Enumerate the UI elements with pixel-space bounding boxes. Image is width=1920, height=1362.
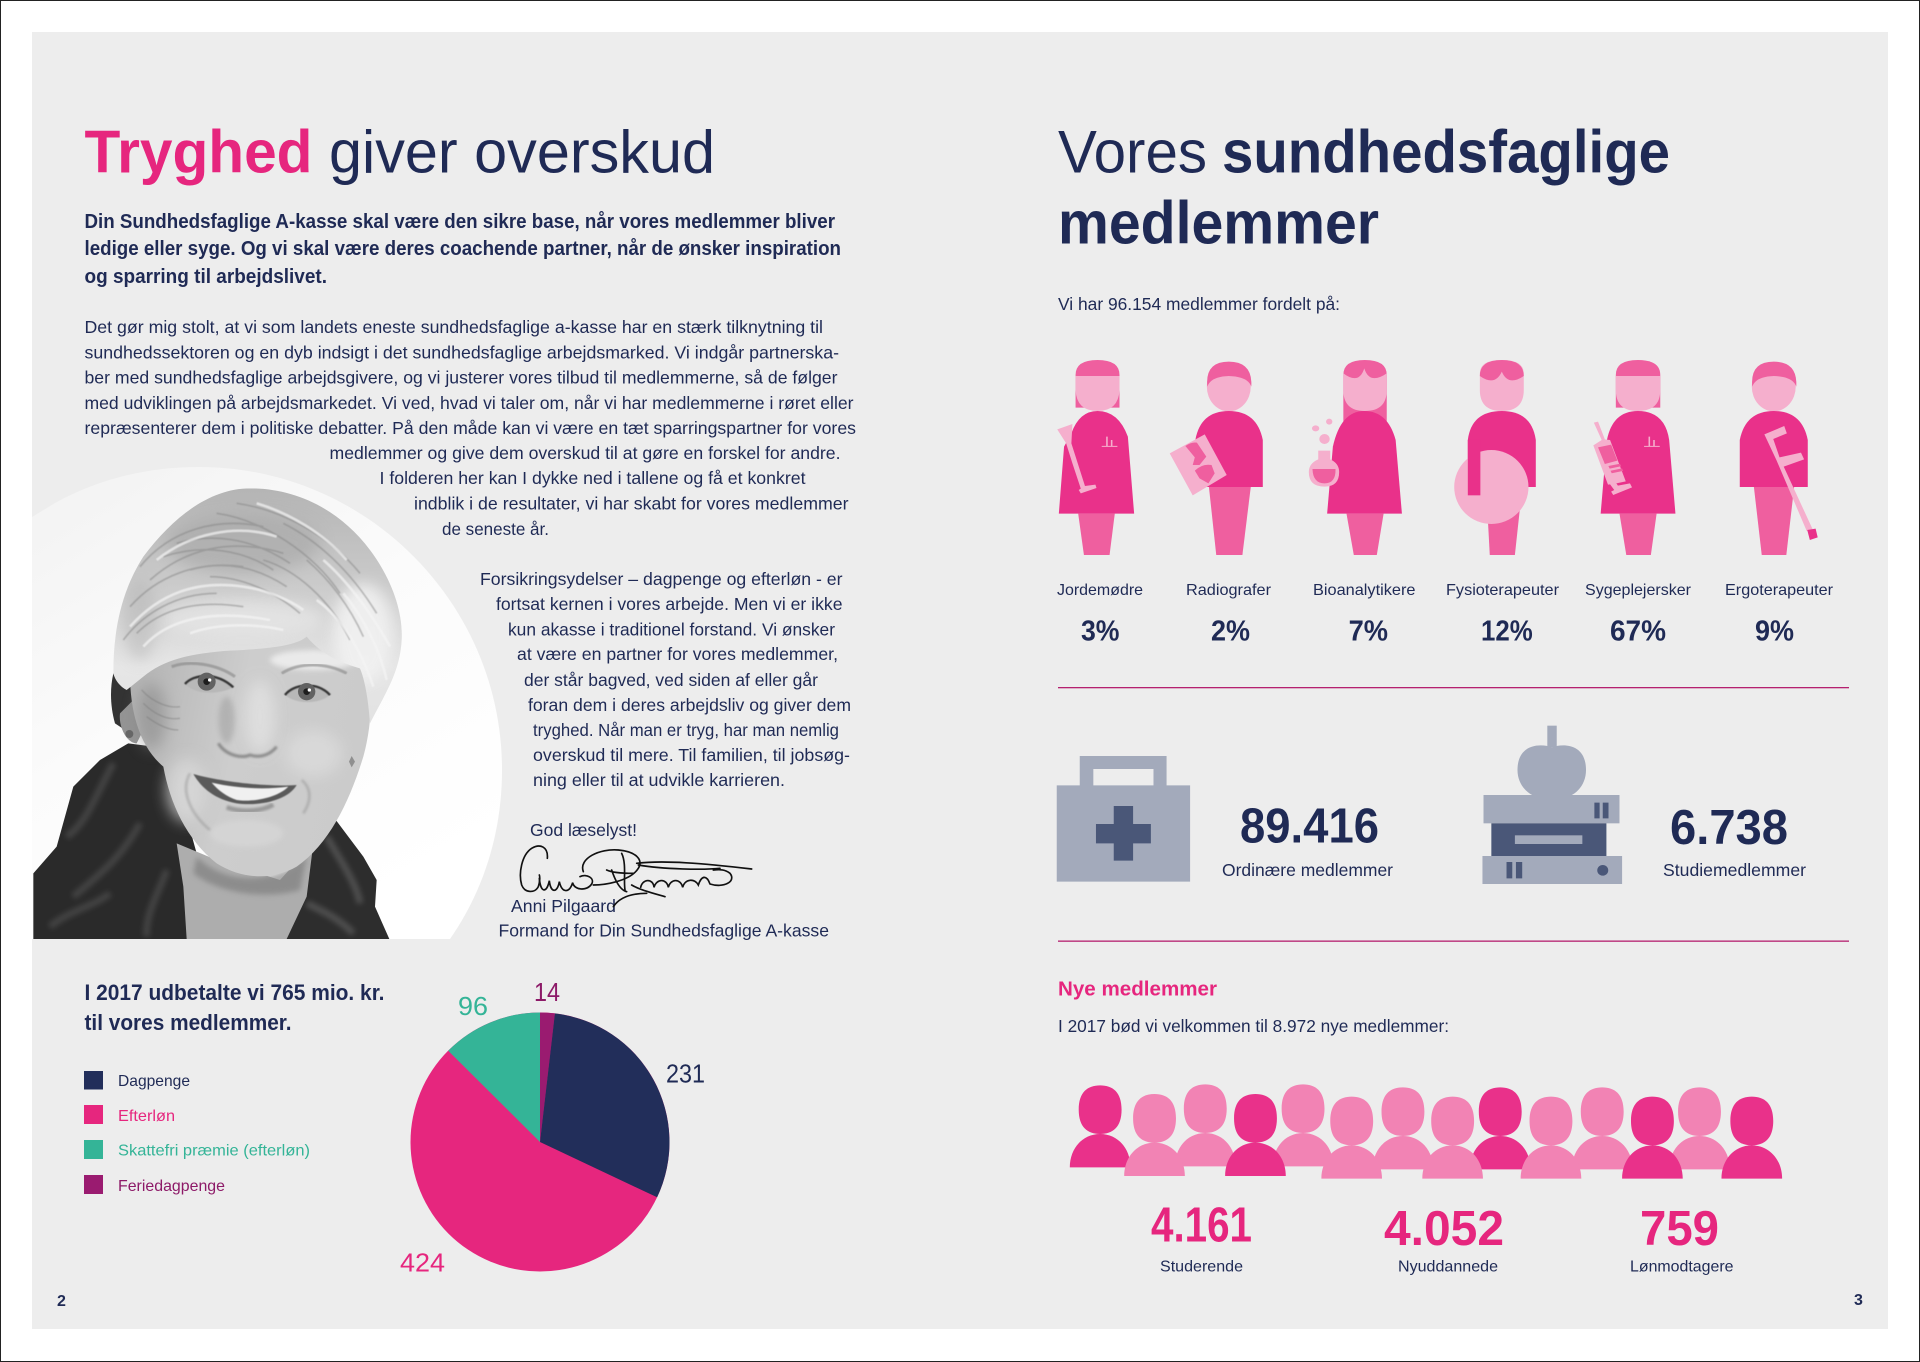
- body text: tryghed. Når man er tryg, har man nemlig: [533, 720, 839, 740]
- ordinary members figure: Ordinære medlemmer: [1222, 860, 1393, 880]
- stat: new graduates: Nyuddannede: [1398, 1259, 1498, 1276]
- pie chart: 14: [534, 977, 560, 1007]
- hair strands dark: [123, 503, 377, 640]
- profession percentages: 2%: [1211, 616, 1250, 648]
- right page title: [1058, 119, 1670, 257]
- dark hair behind left ear: [111, 673, 132, 728]
- pie chart: 231: [666, 1058, 705, 1088]
- profession percentages: 12%: [1481, 616, 1533, 648]
- body text: at være en partner for vores medlemmer,: [517, 644, 838, 664]
- pie legend: Skattefri præmie (efterløn): [118, 1143, 310, 1160]
- payout heading: [84, 980, 384, 1035]
- right page title: medlemmer: [1058, 190, 1379, 257]
- nose: [218, 743, 277, 756]
- figure: radiographer: [1170, 362, 1263, 555]
- body text: Det gør mig stolt, at vi som landets eneste sundhedsfaglige a-kasse har en stærk tilknytning til: [84, 317, 823, 337]
- lead paragraph: [84, 210, 841, 288]
- stat: students: 4.161: [1151, 1199, 1252, 1253]
- body text: med udviklingen på arbejdsmarkedet. Vi ved, hvad vi taler om, når vi har medlemmerne i røret eller: [84, 393, 854, 413]
- earrings: [125, 730, 133, 738]
- jacket left highlights: [50, 763, 167, 937]
- page number 3: 3: [1854, 1292, 1863, 1309]
- profession percentages: [1081, 616, 1794, 648]
- lead paragraph: og sparring til arbejdslivet.: [84, 266, 327, 288]
- icon: books and apple: [1482, 726, 1622, 884]
- profession labels: [1057, 582, 1834, 599]
- page number 2: 2: [57, 1293, 66, 1310]
- stat: new graduates: 4.052: [1384, 1202, 1504, 1256]
- stat: students: [1151, 1199, 1252, 1276]
- payout heading: I 2017 udbetalte vi 765 mio. kr.: [84, 980, 384, 1005]
- left ear: [120, 702, 141, 744]
- profession percentages: 9%: [1755, 616, 1794, 648]
- ordinary members figure: [1222, 800, 1393, 880]
- profession percentages: 3%: [1081, 616, 1120, 648]
- body text: kun akasse i traditionel forstand. Vi ønsker: [508, 620, 835, 640]
- figure: nurse: [1593, 360, 1675, 555]
- professions figures: [1057, 360, 1818, 555]
- hair: [110, 487, 407, 727]
- right page title: sundhedsfaglige: [1222, 119, 1670, 186]
- member intro: Vi har 96.154 medlemmer fordelt på:: [1058, 294, 1340, 314]
- body text: Anni Pilgaard: [511, 896, 616, 916]
- left page title: [84, 119, 715, 186]
- profession percentages: 67%: [1610, 616, 1666, 648]
- pie chart: 424: [400, 1248, 445, 1278]
- body text: fortsat kernen i vores arbejde. Men vi er ikke: [496, 594, 842, 614]
- shadow under chin: [193, 857, 307, 895]
- new members intro: I 2017 bød vi velkommen til 8.972 nye medlemmer:: [1058, 1016, 1449, 1036]
- body text: I folderen her kan I dykke ned i tallene og få et konkret: [380, 468, 806, 488]
- temple wrinkles: [142, 690, 180, 730]
- pie legend: Feriedagpenge: [118, 1178, 225, 1195]
- body text: sundhedssektoren og en dyb indsigt i det sundhedsfaglige arbejdsmarked. Vi indgår partnerska-: [84, 342, 839, 362]
- body text: overskud til mere. Til familien, til jobsøg-: [533, 745, 850, 765]
- body text: de seneste år.: [442, 519, 549, 539]
- body text: [84, 317, 856, 940]
- lead paragraph: ledige eller syge. Og vi skal være deres coachende partner, når de ønsker inspiration: [84, 237, 841, 260]
- ordinary members figure: 89.416: [1240, 800, 1379, 854]
- neck and chest: [177, 843, 313, 939]
- student members figure: 6.738: [1670, 801, 1788, 855]
- stat: employees: Lønmodtagere: [1630, 1259, 1734, 1276]
- pie legend: Efterløn: [118, 1108, 175, 1125]
- profession labels: Ergoterapeuter: [1725, 582, 1834, 599]
- body text: Formand for Din Sundhedsfaglige A-kasse: [498, 920, 829, 940]
- stat: students: Studerende: [1160, 1259, 1243, 1276]
- figure: bioanalyst: [1309, 360, 1402, 555]
- hair strands light: [130, 503, 390, 687]
- figure: midwife: [1057, 360, 1134, 555]
- stat: employees: [1630, 1202, 1734, 1276]
- body text: medlemmer og give dem overskud til at gøre en forskel for andre.: [330, 443, 840, 463]
- body text: repræsenterer dem i politiske debatter. På den måde kan vi være en tæt sparringspartner for vores: [84, 418, 856, 438]
- right page title: Vores: [1058, 119, 1207, 186]
- people row: [1070, 1084, 1782, 1179]
- profession labels: Fysioterapeuter: [1446, 582, 1560, 599]
- body text: God læselyst!: [530, 820, 637, 840]
- body text: Forsikringsydelser – dagpenge og efterløn - er: [480, 569, 843, 589]
- jacket right: [286, 821, 390, 939]
- jacket right highlights: [307, 837, 360, 933]
- photo circle with portrait: [32, 460, 512, 940]
- lead paragraph: Din Sundhedsfaglige A-kasse skal være den sikre base, når vores medlemmer bliver: [84, 210, 835, 233]
- left eye: [190, 678, 232, 692]
- student members figure: [1663, 801, 1806, 880]
- pie chart: 96: [458, 991, 488, 1021]
- new members heading: Nye medlemmer: [1058, 978, 1217, 1000]
- body text: der står bagved, ved siden af eller går: [524, 670, 818, 690]
- body text: foran dem i deres arbejdsliv og giver dem: [528, 695, 851, 715]
- signature: [520, 846, 752, 907]
- student members figure: Studiemedlemmer: [1663, 860, 1806, 880]
- face shading: [137, 683, 167, 750]
- right eyebrow: [282, 665, 347, 673]
- profession labels: Jordemødre: [1057, 582, 1143, 599]
- profession percentages: 7%: [1349, 616, 1388, 648]
- body text: ber med sundhedsfaglige arbejdsgivere, og vi justerer vores tilbud til medlemmerne, så de følger: [84, 368, 838, 388]
- right eye: [286, 688, 328, 702]
- stat: employees: 759: [1640, 1202, 1719, 1256]
- left eyebrow: [172, 663, 235, 677]
- payout heading: til vores medlemmer.: [84, 1010, 292, 1035]
- body text: indblik i de resultater, vi har skabt for vores medlemmer: [414, 494, 849, 514]
- left page title: Tryghed: [84, 119, 312, 186]
- profession labels: Sygeplejersker: [1585, 582, 1692, 599]
- body text: ning eller til at udvikle karrieren.: [533, 770, 785, 790]
- pie legend: [84, 1071, 310, 1195]
- icon: first aid kit: [1057, 756, 1190, 882]
- pie chart: [400, 977, 705, 1278]
- profession labels: Bioanalytikere: [1313, 582, 1416, 599]
- figure: physiotherapist: [1454, 360, 1536, 555]
- mouth: [193, 774, 297, 804]
- profession labels: Radiografer: [1186, 582, 1272, 599]
- jacket left: [33, 743, 197, 939]
- face: [130, 632, 371, 876]
- left page title: giver overskud: [329, 119, 715, 186]
- pie legend: Dagpenge: [118, 1073, 190, 1090]
- figure: occupational therapist: [1740, 362, 1818, 555]
- smile lines: [186, 773, 309, 830]
